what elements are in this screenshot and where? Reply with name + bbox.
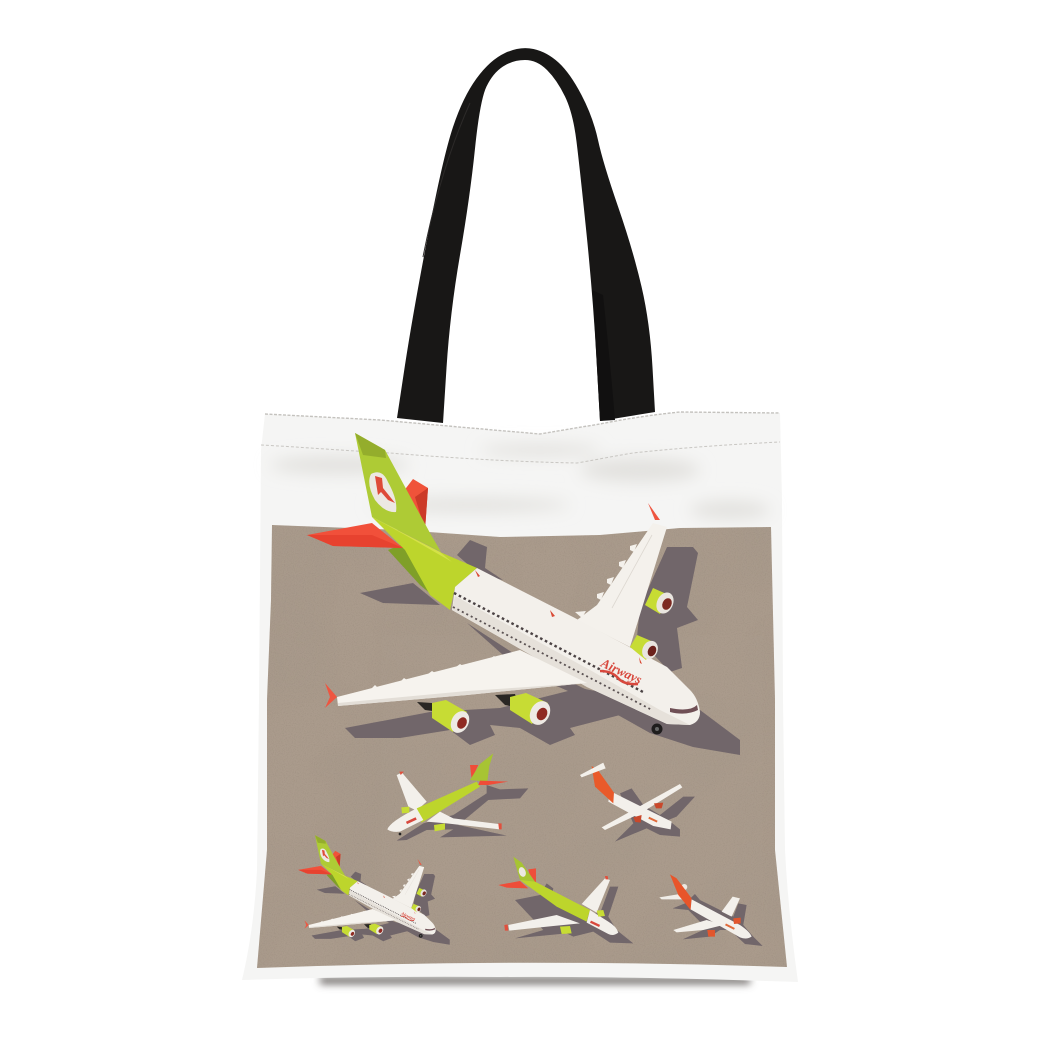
- small plane: orange turboprop, top right: [580, 763, 695, 842]
- small airliner: green tail, bottom left: [298, 835, 450, 945]
- tote bag product illustration: [242, 48, 798, 990]
- bag body: [242, 412, 798, 984]
- small plane: green fuselage, top left: [387, 753, 528, 841]
- cloth: [242, 412, 798, 982]
- bag drop shadow: [320, 977, 750, 984]
- handle: [397, 48, 655, 423]
- cloth wrinkles: [270, 444, 770, 519]
- small plane: green fuselage, bottom centre: [498, 857, 633, 943]
- small plane: orange tail, bottom right: [659, 874, 763, 946]
- print panel: tarmac: [250, 520, 795, 975]
- stitch line: [261, 442, 780, 463]
- large airliner: [307, 433, 740, 755]
